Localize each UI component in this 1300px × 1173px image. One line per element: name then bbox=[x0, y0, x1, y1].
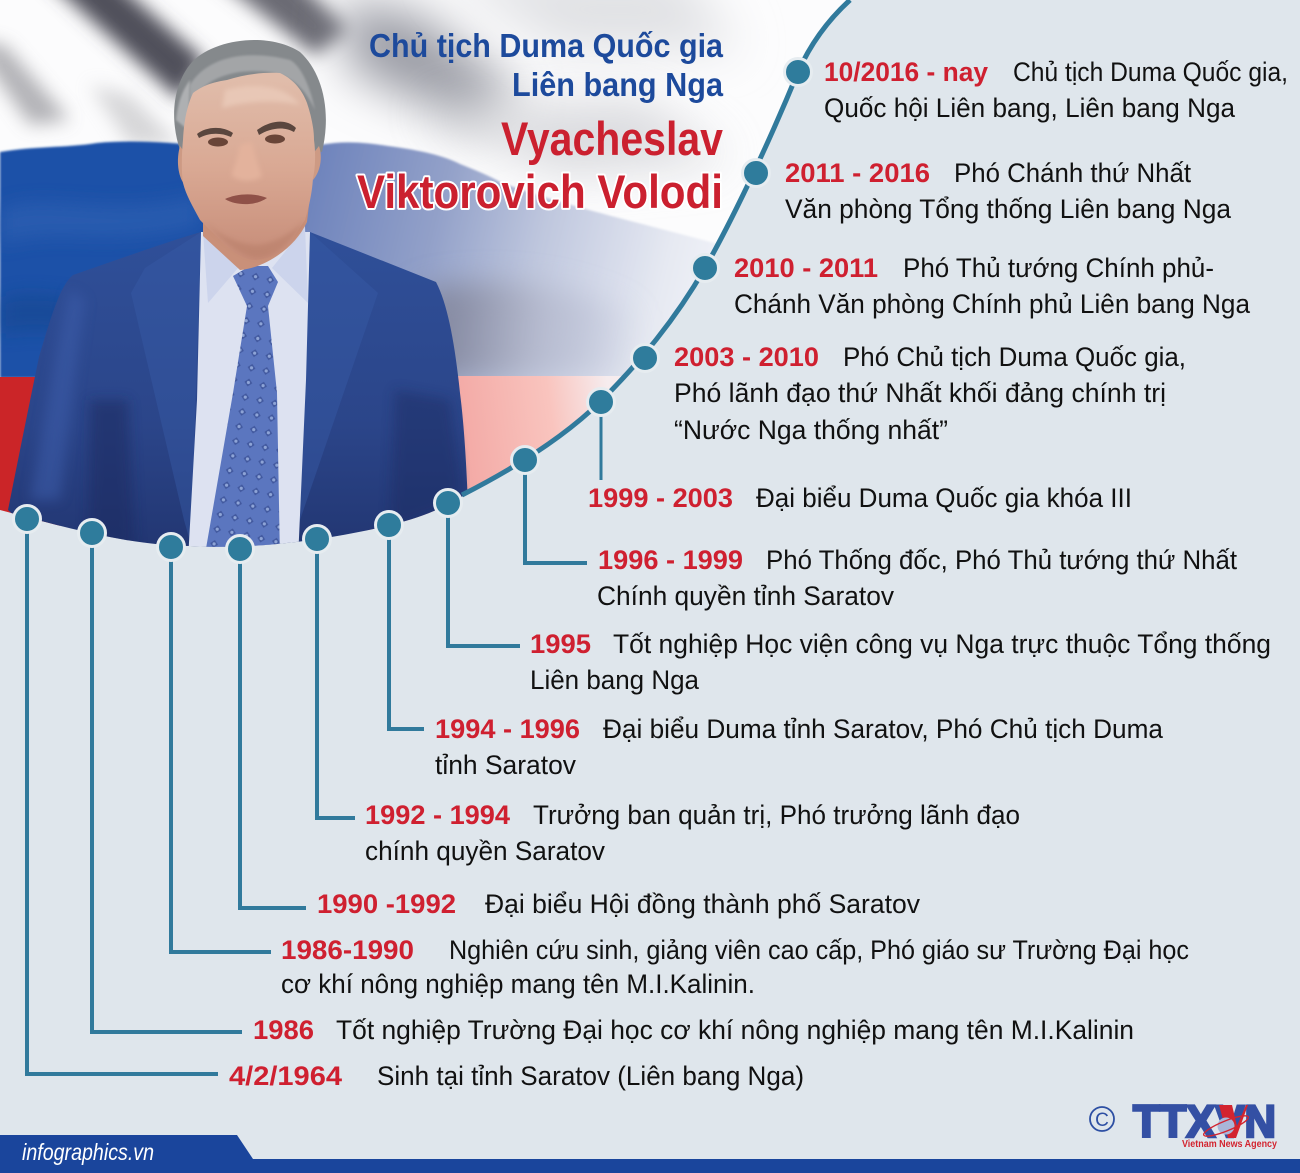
entry: 4/2/1964: 4/2/1964 bbox=[229, 1061, 342, 1091]
head bbox=[174, 40, 326, 270]
entry: 1990 -1992: 1990 -1992 bbox=[317, 889, 456, 919]
chin shadow bbox=[205, 220, 305, 258]
title: office: Chủ tịch Duma Quốc gia bbox=[369, 27, 724, 64]
title: office bbox=[369, 27, 724, 103]
russian flag background bbox=[0, 0, 860, 560]
entry: 1990 -1992: Đại biểu Hội đồng thành phố Saratov bbox=[485, 889, 920, 919]
entry: 1986-1990: Nghiên cứu sinh, giảng viên cao cấp, Phó giáo sư Trường Đại học bbox=[449, 935, 1189, 965]
entry: 2003 - 2010: “Nước Nga thống nhất” bbox=[674, 415, 948, 445]
entry: 1986-1990 bbox=[281, 935, 1189, 999]
entry: 1996 - 1999: Phó Thống đốc, Phó Thủ tướng thứ Nhất bbox=[766, 545, 1237, 575]
entry: 1992 - 1994 bbox=[365, 800, 1020, 866]
entry: 2003 - 2010: Phó Chủ tịch Duma Quốc gia, bbox=[843, 342, 1186, 372]
entry: 10/2016 - nay: 10/2016 - nay bbox=[824, 57, 988, 87]
mouth bbox=[225, 194, 267, 204]
entry: 1995: Liên bang Nga bbox=[530, 665, 700, 695]
entry: 1992 - 1994: Trưởng ban quản trị, Phó trưởng lãnh đạo bbox=[533, 800, 1020, 830]
collar bbox=[203, 232, 238, 303]
entry: 1992 - 1994: chính quyền Saratov bbox=[365, 836, 605, 866]
title: name bbox=[357, 112, 723, 218]
entry: 2011 - 2016: 2011 - 2016 bbox=[785, 158, 930, 188]
eyebrows bbox=[197, 128, 233, 138]
leader lines bbox=[27, 402, 601, 1074]
entry: 2003 - 2010 bbox=[674, 342, 1186, 445]
entry: 1999 - 2003: 1999 - 2003 bbox=[588, 483, 733, 513]
nose bbox=[232, 142, 262, 180]
entry: 2010 - 2011: Phó Thủ tướng Chính phủ- bbox=[903, 253, 1214, 283]
red V and globe bbox=[1202, 1105, 1250, 1140]
entry: 10/2016 - nay: Quốc hội Liên bang, Liên bang Nga bbox=[824, 93, 1236, 123]
timeline dots bbox=[14, 58, 812, 562]
entry: 1986: 1986 bbox=[253, 1015, 314, 1045]
entry: 4/2/1964: Sinh tại tỉnh Saratov (Liên bang Nga) bbox=[377, 1061, 804, 1091]
entry: 1996 - 1999 bbox=[597, 545, 1237, 611]
title: office: Liên bang Nga bbox=[512, 66, 724, 103]
entry: 1986-1990: 1986-1990 bbox=[281, 935, 414, 965]
neck bbox=[203, 170, 313, 270]
entry: 1996 - 1999: Chính quyền tỉnh Saratov bbox=[597, 581, 894, 611]
entry: 1994 - 1996 bbox=[435, 714, 1164, 780]
entry: 2003 - 2010: 2003 - 2010 bbox=[674, 342, 819, 372]
entry: 1992 - 1994: 1992 - 1994 bbox=[365, 800, 510, 830]
footer source: infographics.vn bbox=[22, 1139, 154, 1165]
copyright symbol bbox=[1090, 1107, 1114, 1131]
agency name: Vietnam News Agency bbox=[1182, 1139, 1277, 1150]
entry: 1994 - 1996: Đại biểu Duma tỉnh Saratov, Phó Chủ tịch Duma bbox=[603, 714, 1164, 744]
tie bbox=[204, 266, 280, 560]
ears bbox=[178, 146, 190, 184]
footer bar bbox=[0, 1135, 1300, 1173]
shirt bbox=[188, 232, 310, 560]
eyes bbox=[208, 138, 228, 146]
entry: 1999 - 2003: Đại biểu Duma Quốc gia khóa III bbox=[756, 483, 1132, 513]
entry: 2010 - 2011: Chánh Văn phòng Chính phủ Liên bang Nga bbox=[734, 289, 1251, 319]
entry: 2010 - 2011: 2010 - 2011 bbox=[734, 253, 878, 283]
entry: 2011 - 2016: Phó Chánh thứ Nhất bbox=[954, 158, 1191, 188]
entry: 2003 - 2010: Phó lãnh đạo thứ Nhất khối đảng chính trị bbox=[674, 378, 1166, 408]
entry: 1996 - 1999: 1996 - 1999 bbox=[598, 545, 743, 575]
wordmark: TTXVN bbox=[1133, 1096, 1276, 1147]
copyright symbol: C bbox=[1095, 1110, 1109, 1131]
entry: 10/2016 - nay bbox=[824, 57, 1288, 123]
face bbox=[182, 73, 315, 260]
entry: 2011 - 2016 bbox=[785, 158, 1232, 224]
entry: 1994 - 1996: 1994 - 1996 bbox=[435, 714, 580, 744]
entry: 2011 - 2016: Văn phòng Tổng thống Liên bang Nga bbox=[785, 194, 1232, 224]
entry: 1995: 1995 bbox=[530, 629, 591, 659]
title: name: Viktorovich Volodi bbox=[357, 165, 723, 218]
entry: 1986-1990: cơ khí nông nghiệp mang tên M.I.Kalinin. bbox=[281, 969, 755, 999]
timeline curve bbox=[462, 0, 850, 495]
hair bbox=[174, 40, 326, 152]
entry: 1995 bbox=[530, 629, 1271, 695]
entry: 1994 - 1996: tỉnh Saratov bbox=[435, 750, 576, 780]
logo: TTXVN bbox=[1090, 1096, 1277, 1150]
entry: 1995: Tốt nghiệp Học viện công vụ Nga trực thuộc Tổng thống bbox=[613, 629, 1271, 659]
entry: 2010 - 2011 bbox=[734, 253, 1251, 319]
entry: 1986: Tốt nghiệp Trường Đại học cơ khí nông nghiệp mang tên M.I.Kalinin bbox=[336, 1015, 1134, 1045]
entry: 1999 - 2003 bbox=[588, 483, 1132, 513]
title: name: Vyacheslav bbox=[501, 112, 723, 165]
portrait photo: Volodin bbox=[8, 226, 470, 560]
jacket bbox=[8, 232, 470, 560]
